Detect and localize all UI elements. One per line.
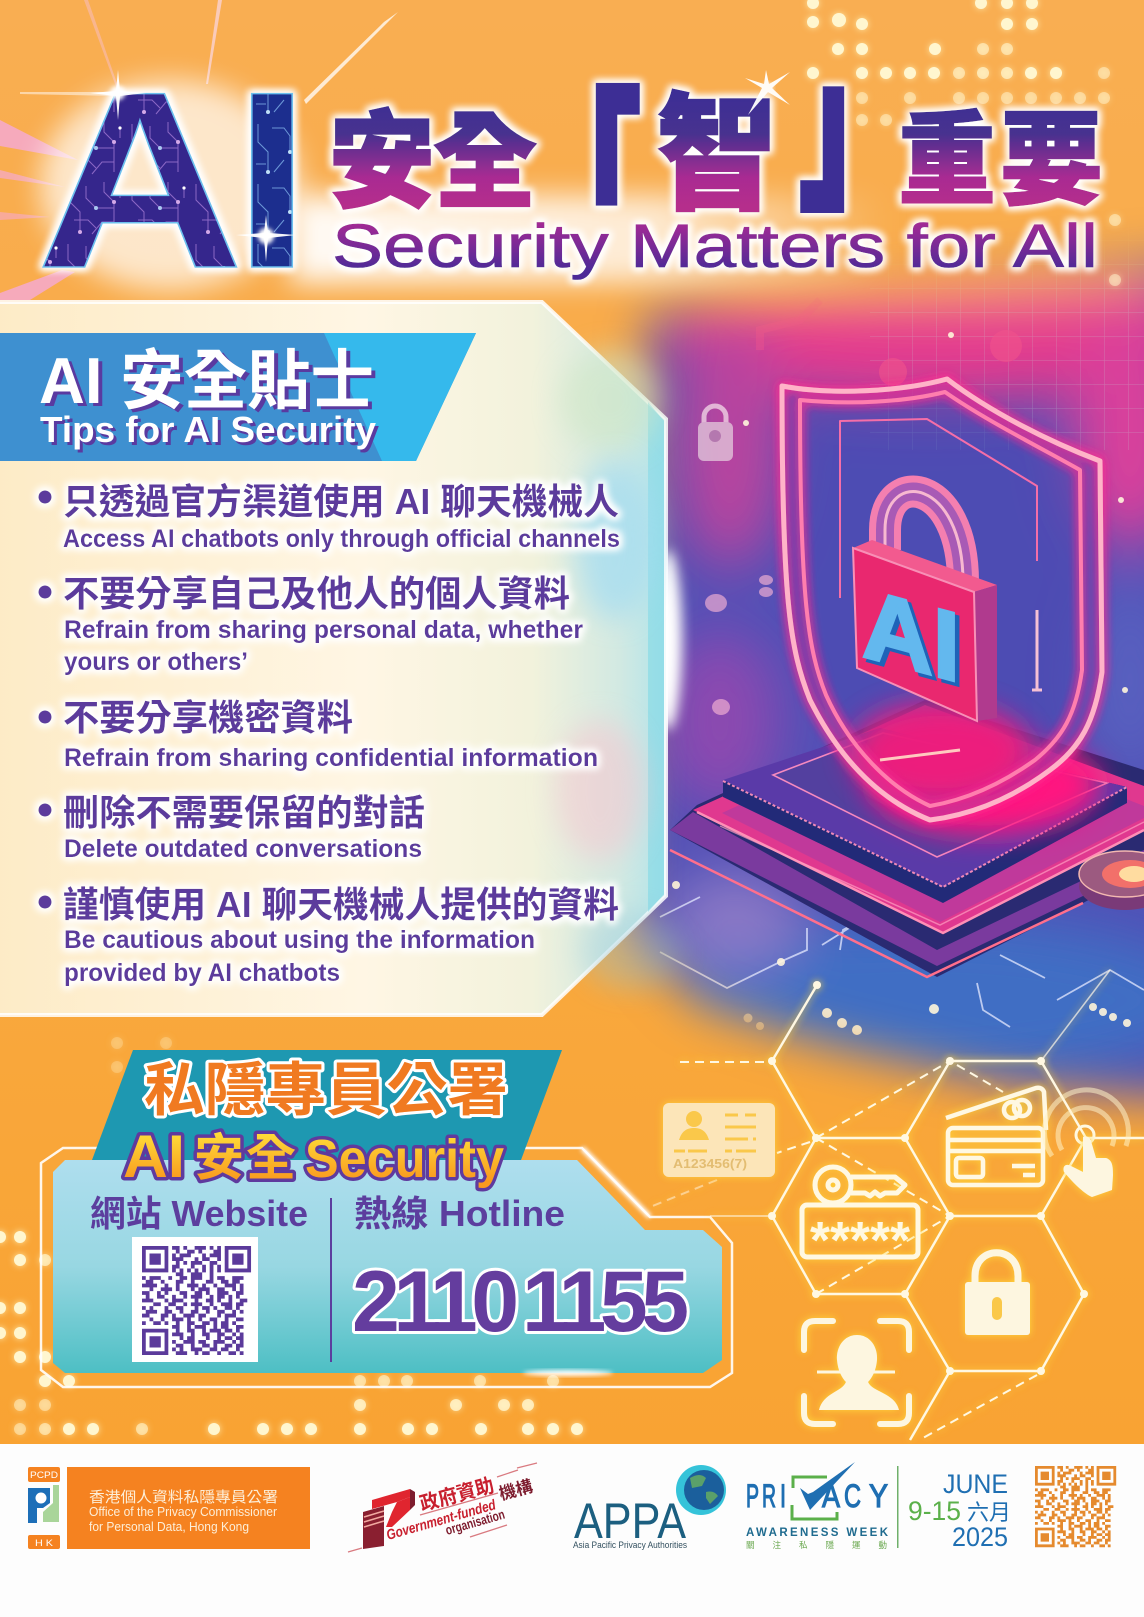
panel backdrop: glowing abstract art of circuit board <box>610 228 1144 1134</box>
title: Chinese headline: 智 <box>657 54 777 236</box>
logo tab text PCPD: PCPD <box>30 1470 59 1480</box>
title: English subtitle: Security Matters for All <box>332 212 1098 280</box>
heading: AI security tips Chinese: AI 安全貼士 <box>43 347 378 420</box>
website QR code <box>132 1237 258 1362</box>
teal banner <box>92 1050 562 1160</box>
art: chip platform stack <box>670 700 1144 977</box>
icon: ID card <box>663 1103 775 1177</box>
tip 1: 只透過官方渠道使用 AI 聊天機械人 <box>63 481 619 522</box>
tip 3: Refrain from sharing confidential information <box>64 744 598 772</box>
icon network: hexagon links <box>650 970 1144 1440</box>
logo: government-funded organisation <box>348 1463 537 1552</box>
title: Chinese headline: 全 <box>434 77 536 228</box>
logo: government-funded organisation: Government-funded <box>385 1497 499 1544</box>
footer divider <box>897 1466 898 1548</box>
website label: 網站 Website <box>90 1193 308 1234</box>
tip 4: 刪除不需要保留的對話 <box>63 792 425 833</box>
flare glow on panel edge <box>654 550 682 730</box>
title: big AI letters <box>36 40 311 321</box>
green frame and tick V <box>792 1462 855 1519</box>
footer band <box>0 1444 1144 1617</box>
title: Chinese headline: 「 <box>526 33 640 294</box>
logo: APPA: Asia Pacific Privacy Authorities <box>573 1540 687 1550</box>
tip 5: provided by AI chatbots <box>64 959 340 987</box>
footer QR code <box>1035 1467 1115 1546</box>
tips heading banner <box>0 333 476 461</box>
wordmark PRIVACY: A <box>822 1478 841 1514</box>
icon: globe <box>676 1465 726 1515</box>
icon: padlock <box>965 1253 1030 1335</box>
logo: PCPD name plate: for Personal Data, Hong Kong <box>89 1520 249 1534</box>
panel: AI security tips <box>0 302 680 1015</box>
icon: face scan <box>804 1321 909 1424</box>
banner heading: AI security <box>123 1118 504 1190</box>
logo: APPA: APPA <box>574 1493 687 1549</box>
banner heading: AI security: Security <box>305 1129 504 1189</box>
logo: APPA <box>573 1465 726 1550</box>
divider <box>330 1198 332 1362</box>
password stars: ***** <box>810 1212 911 1270</box>
logo: government-funded organisation: 機構 <box>496 1472 535 1505</box>
title: Chinese headline: 要 <box>1000 79 1103 226</box>
tips list <box>38 481 620 987</box>
heading: AI security tips Chinese: AI 安全貼士 <box>39 344 374 417</box>
hotline number: 2110 1155 <box>352 1254 687 1350</box>
light rays behind AI <box>0 0 398 300</box>
banner heading: PCPD: 私隱專員公署 <box>144 1043 508 1127</box>
glow behind title <box>40 80 890 290</box>
date: June 9-15 2025 <box>908 1469 1011 1552</box>
icon: key and password <box>802 1167 918 1270</box>
tip 3: 不要分享機密資料 <box>63 697 353 738</box>
tip 2: Refrain from sharing personal data, whether <box>64 616 583 644</box>
art: padlock with AI <box>853 492 997 721</box>
art: round component <box>1079 851 1144 910</box>
art: small background padlock <box>698 406 733 461</box>
wordmark PRIVACY: I <box>780 1478 786 1514</box>
title: Chinese headline: 安 <box>329 77 435 228</box>
icon: star flares on AI <box>90 70 296 262</box>
date: June 9-15 2025: JUNE <box>943 1469 1008 1499</box>
banner heading: AI security: 安全 <box>194 1118 296 1190</box>
wordmark PRIVACY: C <box>844 1478 861 1514</box>
ID number: A123456(7) <box>673 1156 747 1171</box>
tip 2: 不要分享自己及他人的個人資料 <box>63 573 570 614</box>
tip 5 <box>38 884 619 987</box>
logo: Privacy Awareness Week <box>746 1462 889 1551</box>
logo: government-funded organisation: organisation <box>444 1507 506 1538</box>
logo: Privacy Awareness Week: AWARENESS WEEK <box>746 1527 889 1539</box>
logo: PCPD name plate: 香港個人資料私隱專員公署 <box>89 1486 278 1507</box>
icon: star flare on 智 <box>745 70 790 115</box>
LED dots top right <box>807 0 1121 286</box>
tip 3 <box>38 697 598 772</box>
icon: credit cards <box>946 1088 1046 1185</box>
logo: PCPD <box>28 1467 60 1549</box>
icon: tapping hand <box>1044 1090 1128 1197</box>
art: circuit traces <box>660 300 1144 1027</box>
tip 5: 謹慎使用 AI 聊天機械人提供的資料 <box>63 884 619 925</box>
tip 1 <box>38 481 620 553</box>
hotline label: 熱線 Hotline <box>354 1193 565 1234</box>
logo: Privacy Awareness Week: 關注私隱運動 <box>746 1539 887 1551</box>
tip 4: Delete outdated conversations <box>64 835 422 863</box>
logo: PCPD name plate <box>67 1467 310 1549</box>
art: neon shield <box>782 379 1102 820</box>
title: big AI letters: I <box>233 40 311 321</box>
heading: Tips for AI Security: Tips for AI Security <box>40 409 376 450</box>
wordmark PRIVACY: Y <box>869 1478 888 1514</box>
art: blue AI letters: AI <box>866 573 964 708</box>
logo: government-funded organisation: 政府資助 <box>416 1469 497 1517</box>
LED dots bottom left <box>0 1037 583 1435</box>
tip 2: yours or others’ <box>64 648 248 676</box>
title: big AI letters: A <box>36 40 244 321</box>
logo tab text HK: H K <box>35 1538 53 1548</box>
title: Chinese headline <box>329 0 1103 294</box>
wordmark PRIVACY <box>746 1478 888 1514</box>
title: Chinese headline: 重 <box>898 79 996 226</box>
art: padlock with AI: AI <box>862 569 960 704</box>
wordmark PRIVACY: R <box>762 1478 776 1514</box>
date: June 9-15 2025: 六月 <box>967 1495 1011 1527</box>
banner heading: AI security: AI <box>123 1123 185 1190</box>
tip 4 <box>38 792 425 863</box>
wordmark PRIVACY: P <box>746 1478 759 1514</box>
date: June 9-15 2025: 9-15 <box>908 1496 961 1526</box>
logo: PCPD name plate: Office of the Privacy Commissioner <box>89 1505 277 1519</box>
date: June 9-15 2025: 2025 <box>952 1522 1008 1552</box>
panel: contact box <box>41 1043 732 1387</box>
heading: Tips for AI Security: Tips for AI Security <box>43 412 379 453</box>
tip 2 <box>38 573 583 676</box>
tip 5: Be cautious about using the information <box>64 926 535 954</box>
tip 1: Access AI chatbots only through official channels <box>63 525 620 553</box>
